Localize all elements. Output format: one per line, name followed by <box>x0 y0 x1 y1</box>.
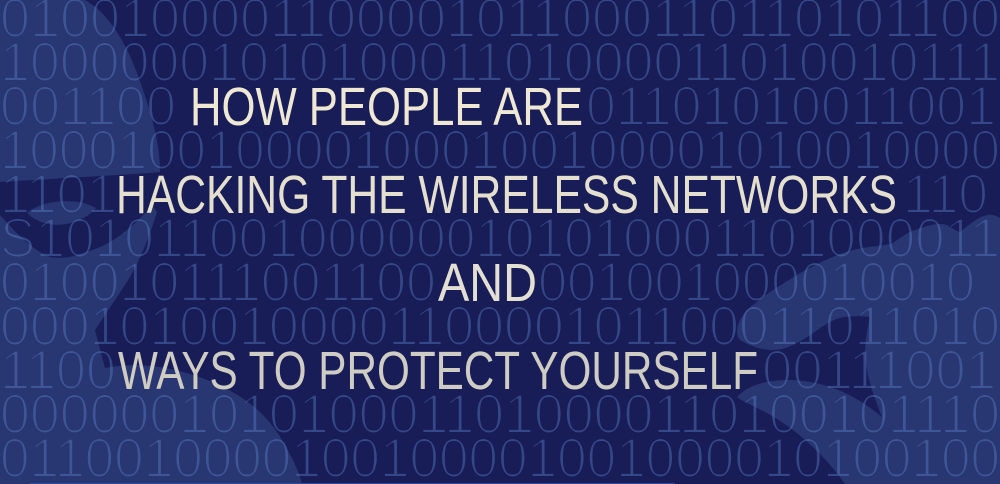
silhouette: left hooded figure <box>0 0 302 484</box>
binary digit pattern: 1101 <box>0 162 117 225</box>
bottom edge line <box>30 483 675 484</box>
binary digit pattern: 00111001 <box>762 338 996 401</box>
title line 3: AND <box>438 253 537 313</box>
binary digit pattern: 001100 <box>0 74 176 137</box>
title <box>116 77 897 401</box>
silhouette: right figure <box>737 215 1000 484</box>
title line 4: WAYS TO PROTECT YOURSELF <box>118 341 758 401</box>
binary digit pattern: 001001000010010 <box>538 250 975 313</box>
binary digit pattern: 110 <box>903 162 988 225</box>
binary digit pattern: 010010111001100 <box>0 250 436 313</box>
eye <box>27 201 96 225</box>
binary digit pattern: 1100 <box>0 338 116 401</box>
title line 1: HOW PEOPLE ARE <box>190 77 583 137</box>
